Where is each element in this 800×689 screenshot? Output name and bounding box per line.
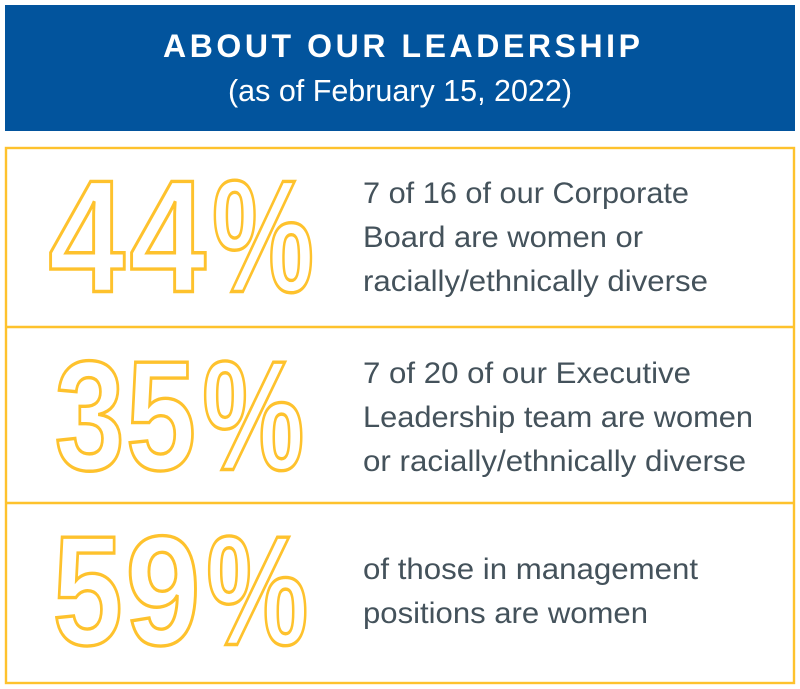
- stat: 44%: %: [212, 146, 314, 326]
- text: executive leadership: Leadership team are women: [363, 401, 753, 434]
- row: 59 percent: [53, 504, 699, 678]
- row: 44 percent: [48, 146, 708, 326]
- panel: statistics table: [6, 148, 794, 683]
- text: executive leadership: 7 of 20 of our Executive: [363, 357, 691, 390]
- stat: 44%: 4: [130, 146, 206, 326]
- text: corporate board: [363, 177, 708, 298]
- stat: 59%: 5: [53, 504, 123, 678]
- text: executive leadership: [363, 357, 753, 478]
- text: executive leadership: or racially/ethnically diverse: [363, 445, 746, 478]
- stat: 44%: 4: [48, 146, 125, 326]
- stat: 35%: %: [202, 330, 304, 504]
- text: corporate board: racially/ethnically diverse: [363, 265, 708, 298]
- subtitle: (as of February 15, 2022): [228, 73, 572, 108]
- row: 35 percent: [55, 330, 753, 504]
- header banner: [5, 5, 795, 131]
- stat: 35%: 3: [55, 330, 125, 504]
- text: management positions: [363, 553, 699, 630]
- stat: 35%: 5: [126, 330, 196, 504]
- stat: 59%: 9: [126, 504, 200, 678]
- stat: 59%: %: [206, 504, 308, 678]
- text: corporate board: Board are women or: [363, 221, 643, 254]
- text: corporate board: 7 of 16 of our Corporate: [363, 177, 689, 210]
- title: ABOUT OUR LEADERSHIP: [163, 28, 640, 64]
- text: management positions: positions are women: [363, 597, 648, 630]
- text: management positions: of those in management: [363, 553, 699, 586]
